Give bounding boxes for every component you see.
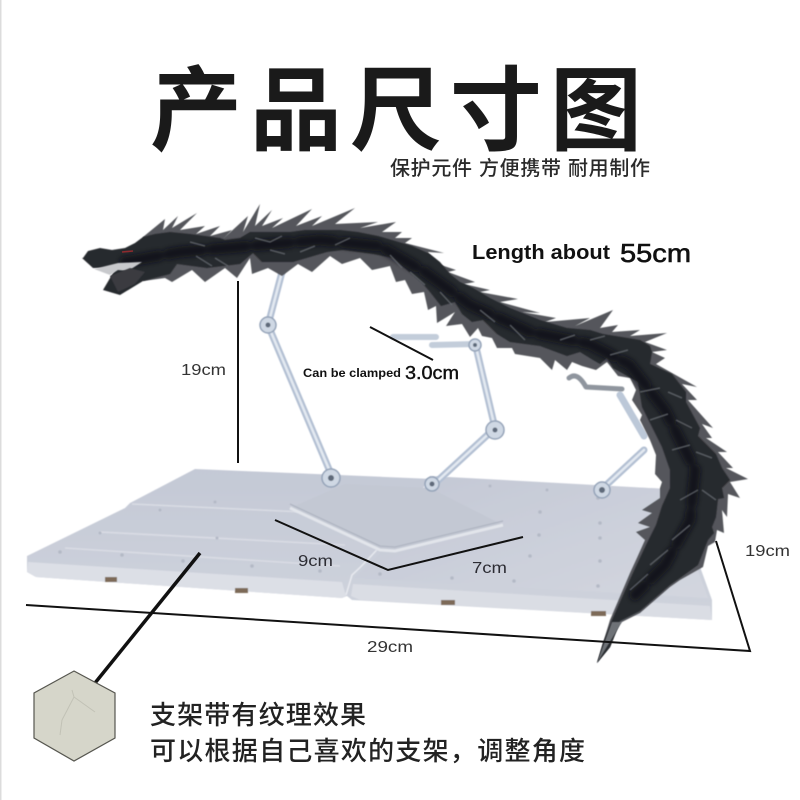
arm 1 (268, 272, 331, 474)
dragon figure (82, 204, 748, 663)
label 29cm: 29cm (367, 639, 413, 656)
bottom description (150, 700, 585, 766)
29cm and 19cm bottom line (26, 541, 750, 651)
title: 产品尺寸图 (150, 61, 642, 163)
label clamp: Can be clamped (303, 368, 401, 380)
label height 19cm: 19cm (181, 362, 226, 379)
back and left plate (27, 469, 712, 620)
seam between plates (346, 476, 432, 595)
clamp 3 (569, 376, 622, 389)
dragon tail tip (597, 622, 622, 663)
label length: 55cm (620, 238, 691, 268)
texture hexagon swatch (34, 671, 115, 761)
subtitle: 保护元件 方便携带 耐用制作 (390, 157, 650, 180)
clamp width line (370, 327, 433, 360)
front edge right plate (351, 584, 712, 620)
plate peg holes (58, 484, 602, 588)
dragon black core shadow (125, 240, 695, 595)
base 9cm and 7cm line (275, 520, 523, 570)
measurement lines (26, 281, 750, 651)
label 7cm: 7cm (472, 560, 507, 577)
dragon dark body silhouette (82, 230, 730, 663)
front edge left plate (27, 562, 346, 598)
texture callout leader (95, 553, 200, 683)
label clamp: 3.0cm (405, 363, 459, 383)
arm 3 (620, 395, 644, 436)
label length (472, 238, 691, 268)
brown tabs (105, 577, 606, 616)
bottom description: 支架带有纹理效果 (150, 700, 366, 730)
height line left (237, 281, 239, 463)
label clamp (303, 363, 459, 383)
white display base plates (27, 469, 712, 620)
label 9cm: 9cm (298, 553, 333, 570)
clamp 2 (393, 337, 476, 345)
arm 2 (432, 347, 495, 486)
dragon scale highlights (190, 236, 716, 590)
label depth 19cm: 19cm (745, 543, 790, 560)
dragon mouth (94, 262, 142, 275)
plate grooves (65, 504, 345, 566)
dragon red eye (122, 251, 133, 252)
joints (260, 317, 610, 498)
dragon lower jaw (110, 268, 145, 292)
bottom description: 可以根据自己喜欢的支架，调整角度 (150, 736, 585, 766)
label length: Length about (472, 242, 610, 264)
clear diamond stand base (290, 484, 503, 552)
dragon feather fringe (143, 204, 748, 663)
right plate surface (354, 476, 708, 598)
transparent support arms (260, 272, 644, 498)
